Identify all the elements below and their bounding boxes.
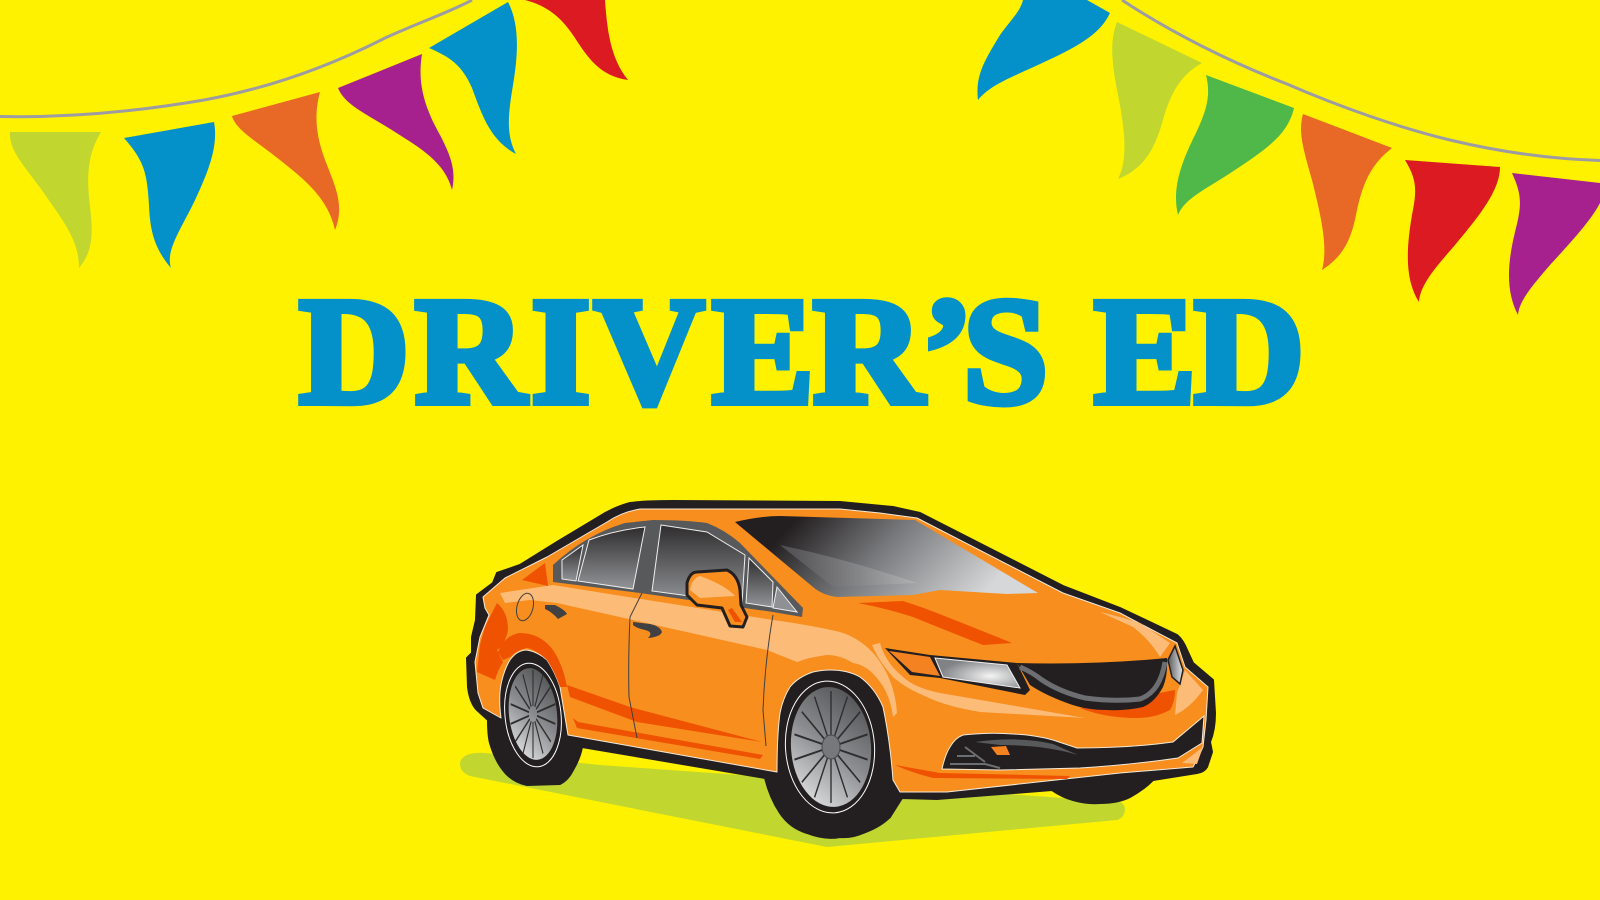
flag: blue xyxy=(429,2,517,154)
right bunting xyxy=(977,0,1600,315)
rear pillar shade xyxy=(522,563,548,586)
rear spokes xyxy=(511,670,555,758)
wheel arch shade xyxy=(498,633,567,687)
fuel door xyxy=(514,591,536,623)
mirror stalk shade xyxy=(728,608,742,622)
front rim xyxy=(787,684,875,810)
door seam front xyxy=(763,615,773,746)
grille xyxy=(1017,658,1167,710)
flag: lime xyxy=(1112,22,1202,179)
rear tyre ring xyxy=(500,660,566,770)
front door window xyxy=(652,525,745,603)
door seam rear xyxy=(629,593,642,738)
car silhouette xyxy=(467,501,1215,838)
flag: blue xyxy=(124,122,215,268)
windshield xyxy=(735,516,1038,597)
front hub xyxy=(822,735,840,759)
rear panel shade xyxy=(477,603,508,680)
headlight amber xyxy=(889,651,940,676)
car illustration xyxy=(467,501,1215,838)
side window frame xyxy=(553,520,803,617)
lip highlight xyxy=(1182,747,1203,764)
flag: red xyxy=(1405,160,1500,302)
side sill shade xyxy=(567,685,762,742)
front tyre ring xyxy=(781,678,879,816)
flag: green xyxy=(1176,75,1294,215)
grille lip xyxy=(1020,662,1165,700)
rear door handle xyxy=(545,605,567,619)
front spokes xyxy=(794,691,868,803)
flag: purple xyxy=(1509,173,1600,315)
lower bumper stripe xyxy=(895,765,1070,779)
left bunting string xyxy=(0,0,472,117)
lower intake xyxy=(942,716,1204,770)
title: DRIVER’S ED xyxy=(299,268,1304,436)
bumper highlight xyxy=(872,643,1085,718)
small front window xyxy=(746,558,773,607)
right bunting string xyxy=(1122,0,1600,160)
hood highlight xyxy=(1100,612,1170,657)
flag: blue xyxy=(977,0,1110,100)
car shadow xyxy=(460,753,1125,847)
rear quarter window xyxy=(562,545,583,581)
hood stripe xyxy=(858,601,1012,645)
front door handle xyxy=(633,622,662,638)
windshield reflection xyxy=(780,545,917,587)
flag: orange xyxy=(232,92,339,230)
fog light xyxy=(991,746,1010,755)
flag: orange xyxy=(1301,114,1392,270)
corner highlight xyxy=(1175,670,1203,715)
rear door window xyxy=(578,527,645,589)
fog vent xyxy=(950,747,1000,768)
flag: lime xyxy=(10,132,101,268)
corner window xyxy=(773,587,797,612)
flag: red xyxy=(525,0,628,80)
left bunting xyxy=(0,0,628,268)
headlight xyxy=(885,648,1030,695)
headlight lens xyxy=(935,658,1020,688)
side mirror xyxy=(687,570,747,627)
side sill stripe xyxy=(573,718,763,759)
badge xyxy=(1168,646,1183,684)
mirror highlight xyxy=(690,576,735,598)
front wheel xyxy=(781,678,879,816)
rear wheel xyxy=(500,660,566,770)
grille shade xyxy=(1080,690,1175,718)
rear rim xyxy=(504,666,562,762)
flag: purple xyxy=(338,54,454,190)
car body xyxy=(475,509,1208,792)
intake trim xyxy=(975,739,1078,755)
side highlight band xyxy=(500,585,897,717)
